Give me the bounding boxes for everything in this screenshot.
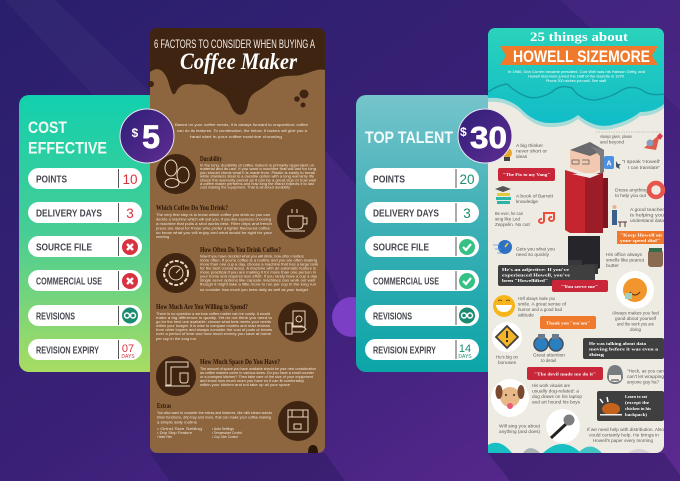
factor: space: within your kitchen and not take up all your space — [200, 382, 290, 387]
factor: which coffee — [156, 199, 317, 239]
factor: extras: • Temperature Control — [212, 430, 242, 435]
tip: big thinker: ideas — [516, 154, 528, 159]
panel: howell sizemore poster — [488, 28, 665, 453]
icon: gauge — [164, 261, 188, 285]
icon: bulb — [502, 148, 512, 161]
icon: jar — [648, 248, 663, 267]
row: revision expiry — [28, 339, 142, 360]
tip: distribution: Howell's paper every morning — [593, 438, 653, 443]
tip: big thinker — [502, 143, 548, 161]
callout: you serve me: "You serve me" — [561, 284, 599, 289]
tip: singing mic: Will sing you about — [499, 424, 541, 428]
row: delivery days — [28, 202, 142, 223]
drip droplets — [148, 81, 308, 108]
callout: thank you — [540, 316, 596, 329]
tip: heck: "Heck, as you can — [627, 368, 664, 374]
factor: how often: for the best convenience. A machine with an automatic feature is — [200, 266, 316, 270]
callout: speed dial — [617, 231, 664, 244]
factor: durability: check the warranty period as it can be a great sign of how well — [200, 177, 316, 182]
row: delivery days: 3 — [126, 206, 134, 221]
factor: durability: Durability — [200, 155, 222, 163]
row: revision expiry: 14 — [459, 343, 471, 355]
callout: speed dial: "Keep Howell on — [620, 232, 663, 238]
tip: dress — [615, 183, 663, 198]
icon: turkey — [600, 397, 622, 416]
factor: budget — [156, 302, 318, 342]
tip: singing — [495, 211, 554, 227]
callout: the fix: "The Fix to my Vang" — [503, 172, 550, 177]
intro text: can do its features. To combination, the below, 6 factors will give you a — [177, 128, 308, 133]
factor: which coffee: press are ideal for those who prefer a lighter flavoured coffee — [156, 226, 270, 230]
factor: extras: timer functions, drip tray and more, that can make your coffee making — [157, 414, 271, 420]
icon: dog — [496, 385, 524, 409]
row: commercial use — [28, 270, 142, 291]
row: commercial use: COMMERCIAL USE — [373, 276, 439, 288]
row: revision expiry — [365, 339, 479, 360]
heading: cost effective — [28, 118, 107, 158]
row: revisions: REVISIONS — [36, 310, 75, 322]
callout: data moving: thing — [589, 352, 605, 357]
callout: adjective: experienced Howell, you've — [502, 272, 570, 278]
tip: smile — [493, 295, 567, 318]
factor: budget: There is no question a serious coffee maker can be costly. It would — [156, 311, 270, 316]
tip: dress: Dress anything — [615, 188, 648, 192]
heading: cost effective: EFFECTIVE — [28, 138, 107, 158]
icon: money hand — [286, 311, 306, 334]
intro text: Howell Sizemore joined the staff of the Gazette in 1970 — [528, 74, 625, 78]
row: points — [365, 168, 479, 189]
panel: coffee maker poster — [148, 28, 325, 453]
icon: microphone — [551, 414, 574, 438]
row: source file — [365, 236, 479, 257]
factor: how often — [156, 246, 318, 293]
tip: teacher — [612, 205, 665, 227]
character — [565, 142, 608, 274]
poster script title: Coffee Maker — [180, 49, 298, 74]
badge: $5 — [120, 109, 174, 163]
factor: space: as coffee makers come in various sizes. Do you have a small counter — [200, 370, 315, 375]
factor: budget: per cup in the long run — [156, 336, 196, 341]
callout: data moving: He was talking about data — [589, 341, 647, 346]
tip: quick: Gets you what you — [516, 246, 555, 252]
factor: how often: more often. If you're coffee is a routine and you are often making — [200, 258, 317, 262]
callout: turkey: Learn to eat — [625, 394, 647, 399]
tip: dog: and art hound his boys — [532, 400, 581, 404]
factor: extras: You also want to consider the extras and features, like milk steam wands — [157, 410, 272, 415]
tip: always given: Always given, please — [600, 134, 632, 139]
factor: space: How Much Space Do You Have? — [200, 358, 280, 366]
row: revision expiry: REVISION EXPIRY — [36, 344, 99, 356]
poster title: 6 FACTORS TO CONSIDER WHEN BUYING A — [154, 37, 315, 51]
factor: space: The amount of space you have available should be your next consideration — [200, 366, 316, 371]
factor: how often: so consider how much you brew daily as well as your budget — [200, 287, 309, 292]
tip: smile: humor and a good bad — [518, 307, 562, 312]
factor: extras: a simple daily routine — [157, 420, 197, 424]
icon: binoculars — [534, 334, 563, 351]
row: delivery days: 3 — [463, 206, 471, 221]
tip: book of knowledge — [495, 186, 554, 204]
intro text — [508, 69, 645, 83]
factor: budget: within your budget. It is wise to compare models and read reviews — [156, 323, 270, 328]
factor: extras — [157, 401, 318, 441]
row: points: 10 — [122, 172, 138, 187]
factor: which coffee: decide a machine which will suit you. If you like espresso choosing — [156, 216, 271, 222]
tip: heck: anyone guy ha? — [627, 380, 659, 384]
tip: quick — [493, 240, 555, 257]
tip: attention — [533, 334, 565, 363]
tip: jar: smells like peanut — [606, 258, 645, 262]
ribbon — [500, 46, 658, 65]
tip: attention: Great attention — [533, 352, 565, 358]
row: commercial use: COMMERCIAL USE — [36, 276, 102, 288]
row: commercial use — [365, 270, 479, 291]
row: revisions — [365, 305, 479, 326]
row: source file: SOURCE FILE — [373, 242, 429, 254]
row: revisions: REVISIONS — [373, 310, 412, 322]
factor: budget: How Much Are You Willing to Spend? — [156, 303, 248, 311]
icon: coffee machine — [165, 362, 190, 386]
icon: teacher — [612, 205, 627, 227]
tip: feel good: good about yourself — [615, 316, 657, 321]
factor: extras: • Drip Stop Feature — [157, 430, 192, 435]
tip: singing mic — [499, 409, 580, 443]
tip: singing mic: anything (and does) — [499, 429, 540, 434]
badge: $5: 5 — [142, 119, 160, 155]
poster title: 25 things about — [530, 30, 629, 44]
callout: turkey: backpack) — [625, 412, 648, 417]
row: delivery days: DELIVERY DAYS — [36, 208, 102, 220]
factor: budget: from other buyers and always consider the cost of pods or beans — [156, 327, 272, 332]
tip: distribution: If we need help with distribution. Also — [587, 427, 664, 432]
row: revisions — [28, 305, 142, 326]
callout: you serve me — [552, 280, 608, 292]
intro text: Based on your coffee needs, it is always forward to unquestion: coffee — [175, 122, 308, 127]
row: revision expiry: 07 — [122, 343, 134, 355]
tip: always given — [596, 132, 663, 150]
factor: which coffee: Which Coffee Do You Drink? — [156, 204, 228, 212]
icon: beans — [165, 160, 189, 188]
callout: the devil — [527, 367, 603, 380]
tip: feel good — [612, 271, 659, 332]
factor: budget: go for the best one available: choose what best meets your needs — [156, 319, 271, 324]
factor: space: or a cramped kitchen? Then take care of the size of your equipment — [200, 374, 314, 379]
badge: $30: $ — [460, 125, 467, 139]
callout: data moving: moving before it was even a — [589, 346, 659, 352]
ribbon name: HOWELL SIZEMORE — [513, 47, 650, 66]
factor: durability: material and its use. If you want a machine that will last for long — [200, 166, 316, 171]
tip: dog: usually dog-related: a — [532, 388, 579, 394]
factor: how often: more practical if you are making it for more than one person in — [200, 270, 316, 274]
bottom scallops — [488, 443, 650, 453]
factor: which coffee: so know what you will enjoy and what would be right for your — [156, 230, 273, 235]
tip: bonuses — [492, 322, 522, 365]
factor: extras: • Water Filter — [157, 434, 172, 439]
row: revision expiry: DAYS — [121, 354, 135, 360]
tip: book of knowledge: A book of Barrett — [516, 194, 554, 198]
factor: how often: single serve options like capsule machines can work out well — [200, 278, 315, 282]
intro text: head start in your coffee machine choosing — [190, 134, 282, 139]
factor: extras: • Cup Size Control — [212, 434, 238, 439]
tip: always given: and beyond — [600, 140, 624, 144]
tip: translate: "I speak 'Howell' — [622, 159, 660, 164]
tip: singing: sing like Led — [495, 216, 520, 222]
heading: top talent: TOP TALENT — [365, 128, 454, 147]
icon: espresso machine — [288, 410, 308, 432]
panel: top talent — [356, 95, 496, 372]
factor: budget: make a big difference in quality. Yet do not think you need to — [156, 315, 272, 320]
row: points: 20 — [459, 172, 475, 187]
tip: smile: He'll always make you — [518, 296, 555, 301]
badge: $30 — [458, 109, 512, 163]
tip: quick: need so quickly — [516, 252, 550, 257]
icon: cup — [285, 209, 307, 231]
factor: how often: Now if you have decided what you will drink, how often matters — [200, 254, 304, 258]
tip: singing: Be ever, he can — [495, 211, 523, 216]
row: points: POINTS — [36, 174, 67, 186]
icon: orange face — [623, 278, 647, 302]
tip: jar — [606, 248, 663, 268]
tip: jar: butter — [606, 263, 620, 268]
callout: the fix — [498, 168, 555, 181]
factor: how often: more than one cup a day, choose a machine that has a large tank — [200, 262, 318, 266]
intro text: Phone 200 wishes you well. See staff — [546, 78, 607, 83]
intro text — [175, 122, 308, 139]
icon: warning — [496, 326, 518, 348]
factor: how often: How Often Do You Drink Coffee? — [200, 246, 281, 254]
row: delivery days: DELIVERY DAYS — [373, 208, 439, 220]
tip: distribution — [587, 427, 664, 443]
tip: singing: Zeppelin. No cut! — [495, 222, 530, 227]
tip: jar: His office always — [606, 252, 643, 257]
icon: grin emoji — [493, 295, 515, 317]
logo mark — [308, 445, 318, 453]
badge: $30: 30 — [470, 120, 507, 155]
cloud inner lines — [488, 84, 664, 100]
callout: turkey: (except the — [625, 400, 649, 405]
callout: adjective — [498, 265, 595, 286]
factor: how often: though it might take a little more to run per cup in the long run — [200, 282, 316, 286]
factor: durability — [156, 154, 316, 194]
icon: rocket — [644, 133, 663, 150]
row: revision expiry: REVISION EXPIRY — [373, 344, 436, 356]
tip: attention: to detail — [541, 358, 556, 363]
icon: lifebuoy — [649, 183, 663, 197]
row: points — [28, 168, 142, 189]
tip: dress: to help you out — [615, 193, 647, 198]
factor: durability: you should check what it is made from. Plastic is easily to break — [200, 170, 315, 175]
factor: how often: your home and requires less effort. If you rarely have a cup a day — [200, 274, 317, 278]
tip: bonuses: bonuses — [498, 360, 517, 365]
tip: smile: smile. A great sense of — [518, 302, 567, 306]
tip: bonuses: He's big on — [496, 354, 518, 360]
tip: teacher: understand data — [630, 218, 664, 223]
factor: durability: a coffee maker performs and how long the brand expects it to last — [200, 181, 315, 186]
factor: durability: In the long, durability of coffee makers is primarily dependent on — [200, 162, 314, 168]
factor: space: and know how much room you have so it can fit comfortably — [200, 378, 304, 383]
factor: which coffee: The very first step is to know which coffee you drink so you can — [156, 212, 270, 217]
tip: big thinker: A big thinker — [516, 143, 544, 148]
icon: grad cap and books — [495, 186, 511, 204]
tip: teacher: A good teacher — [630, 207, 665, 212]
tip: translate: I can translate" — [628, 165, 660, 170]
callout: thank you: Thank you "ma'am" — [546, 320, 590, 326]
callout: turkey — [597, 391, 664, 421]
icon: stopwatch — [493, 240, 512, 254]
row: points: POINTS — [373, 174, 405, 186]
tip: heck: can't let wrapping — [627, 374, 664, 379]
tip: dog: His work visuals are — [532, 383, 570, 388]
factor: extras: Extras — [157, 402, 171, 410]
tip: book of knowledge: knowledge — [516, 199, 538, 204]
panel: cost effective — [19, 95, 159, 372]
icon: speech A: A — [606, 160, 612, 168]
cloud header — [488, 28, 664, 126]
chocolate drip header — [150, 28, 325, 115]
tip: feel good: and the work you are — [617, 322, 654, 326]
intro text: In 1960, Don Curren became president. Curt Weil was his Hanson Getty, and — [508, 69, 645, 74]
factor: extras: • Auto Settings — [212, 426, 234, 431]
tip: big thinker: never short or — [516, 148, 548, 154]
icon: man with moustache — [607, 365, 623, 384]
heading: cost effective: COST — [28, 118, 67, 137]
callout: speed dial: your speed dial" — [620, 238, 661, 243]
cloud lower outline — [488, 90, 664, 130]
icon: music note — [539, 213, 554, 223]
tip: feel good: doing — [630, 327, 641, 332]
factor: durability: cost making the equipment. That is all about durability — [200, 185, 290, 190]
tip: distribution: could certainly help. He brings in — [589, 432, 659, 438]
callout: turkey: chicken in his — [625, 406, 651, 411]
row: revision expiry: DAYS — [458, 354, 472, 360]
callout: adjective: been "Howellified" — [502, 278, 549, 283]
tip: smile: attitude — [518, 312, 534, 318]
row: source file — [28, 236, 142, 257]
tip: teacher: is helping you — [630, 212, 665, 218]
callout: the devil: "The devil made me do it" — [534, 372, 597, 376]
factor: which coffee: a machine that pulls a shot works best. Filter drips and french — [156, 221, 272, 226]
tip: dog: dog draws on his laptop — [532, 394, 582, 399]
row: source file: SOURCE FILE — [36, 242, 92, 254]
row: delivery days — [365, 202, 479, 223]
tip: feel good: Always makes you feel — [612, 310, 659, 316]
factor: which coffee: morning — [156, 234, 169, 239]
callout: adjective: He's an adjective: If you've — [502, 267, 569, 272]
factor: durability: while stainless steel is a durable option with a long warranty life — [200, 174, 314, 179]
callout: data moving — [583, 338, 664, 359]
tip: translate — [604, 156, 660, 170]
tip: dog — [491, 379, 582, 417]
badge: $5: $ — [132, 126, 138, 140]
factor: budget: over a period of time and how much money you save at home — [156, 331, 271, 336]
tip: heck — [607, 365, 664, 384]
factor: extras: • Grind Size Setting — [157, 426, 202, 431]
factor: space — [156, 356, 316, 396]
